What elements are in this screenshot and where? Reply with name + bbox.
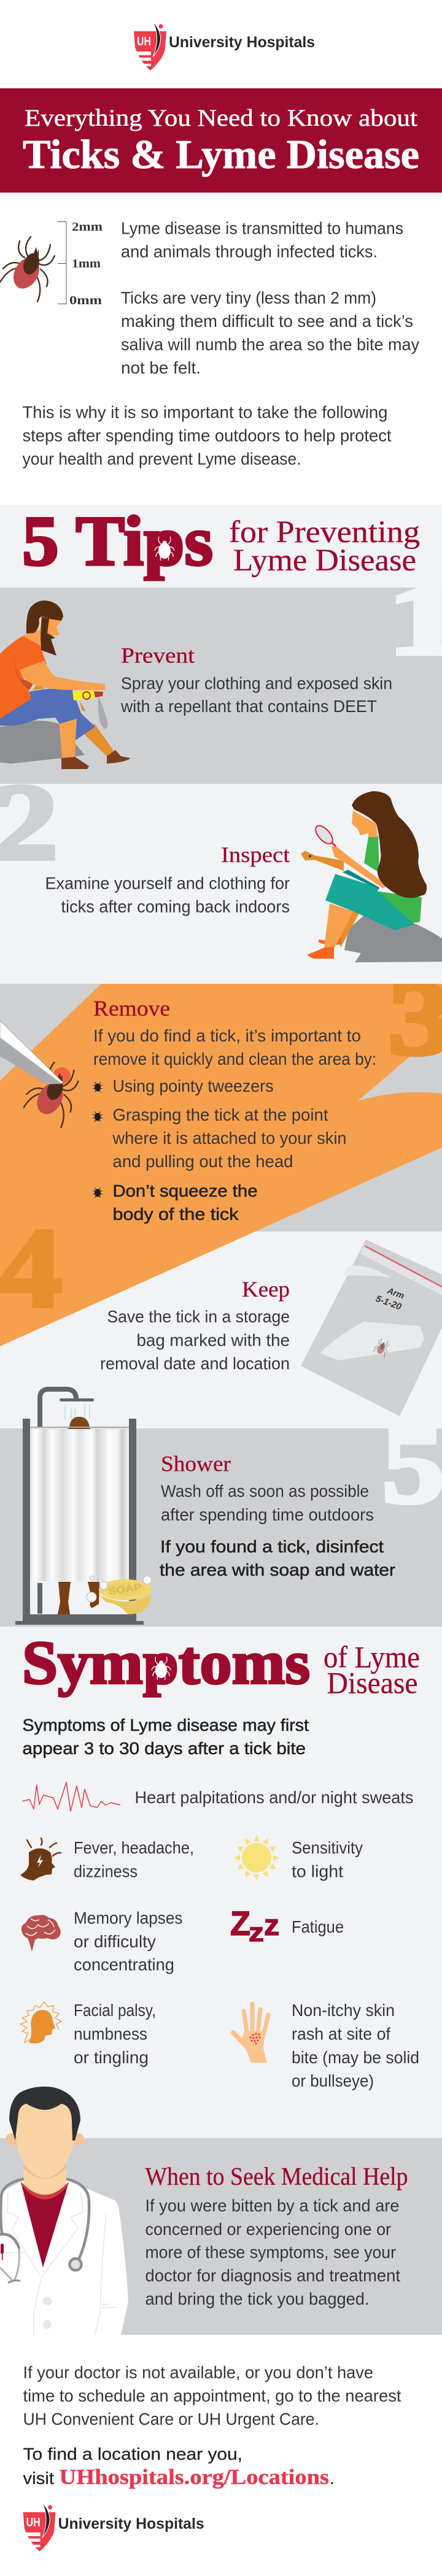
- text: inspect: [45, 843, 290, 916]
- intro text: not be felt.: [121, 358, 201, 377]
- text: shower: the area with soap and water: [160, 1560, 395, 1579]
- title banner: Everything You Need to Know about: [25, 105, 417, 131]
- text: urgent care note: time to schedule an appointment, go to the nearest: [23, 2386, 401, 2405]
- symptom: skin rash: [233, 2001, 419, 2090]
- symptom: fatigue: Fatigue: [292, 1917, 344, 1936]
- footer logo: University Hospitals: UH: [26, 2516, 41, 2529]
- illustration: tweezers removing a tick: [0, 1021, 79, 1127]
- heading: 5 Tips: 5 Tips: [22, 502, 213, 580]
- text: inspect: Examine yourself and clothing for: [45, 873, 290, 893]
- text: inspect: ticks after coming back indoors: [61, 897, 290, 916]
- text: urgent care note: [23, 2363, 401, 2429]
- symptom: skin rash: Non-itchy skin: [292, 2001, 395, 2020]
- symptom: facial palsy: or tingling: [74, 2048, 149, 2067]
- bullet list: Don’t squeeze the: [113, 1181, 258, 1200]
- symptom: light sensitivity: to light: [292, 1862, 343, 1880]
- symptom: heart palpitations: [23, 1782, 413, 1811]
- text: medical help: [145, 2162, 408, 2309]
- text: shower: Wash off as soon as possible: [161, 1482, 369, 1500]
- heading: 5 Tips: for Preventing: [229, 515, 420, 550]
- text: remove: [93, 996, 376, 1224]
- symptom: heart palpitations: Heart palpitations and/or night sweats: [135, 1788, 414, 1807]
- icon: tick with size scale: 1mm: [72, 257, 101, 270]
- heading: symptoms: of Lyme: [324, 1640, 420, 1674]
- text: shower: If you found a tick, disinfect: [160, 1537, 384, 1556]
- panel: tip 2 inspect: [0, 784, 442, 984]
- intro text: making them difficult to see and a tick’s: [121, 312, 413, 331]
- icon: tick with size scale: 0mm: [69, 294, 102, 307]
- intro text: steps after spending time outdoors to help protect: [22, 426, 392, 445]
- text: shower: Shower: [161, 1451, 231, 1476]
- text: medical help: doctor for diagnosis and treatment: [145, 2266, 400, 2285]
- panel: tips 3 and 4 background: [0, 984, 442, 1428]
- intro text: This is why it is so important to take the following: [22, 402, 388, 422]
- title banner: [0, 88, 442, 193]
- title banner: Ticks & Lyme Disease: [23, 132, 419, 177]
- intro text: Ticks are very tiny (less than 2 mm): [121, 288, 376, 307]
- text: medical help: concerned or experiencing one or: [145, 2220, 391, 2239]
- symptom: fever: dizziness: [74, 1862, 138, 1880]
- illustration: shower with soap: [15, 1389, 152, 1625]
- symptom: skin rash: bite (may be solid: [292, 2048, 419, 2067]
- illustration: storage bag with tick: [301, 1240, 442, 1416]
- panel: tip 5 shower: [0, 1389, 442, 1627]
- symptom: memory lapses: Memory lapses: [74, 1909, 183, 1927]
- symptom: fatigue: [230, 1904, 344, 1947]
- panel: when to seek medical help: [0, 2087, 442, 2335]
- icon: tick with size scale: [0, 220, 103, 307]
- illustration: storage bag with tick: 5-1-20: [374, 1294, 403, 1313]
- logo: University Hospitals: University Hospitals: [169, 34, 315, 51]
- bullet list: where it is attached to your skin: [112, 1129, 346, 1148]
- text: medical help: If you were bitten by a tick and are: [145, 2196, 399, 2215]
- text: symptoms intro: Symptoms of Lyme disease may first: [22, 1715, 309, 1735]
- footer logo: University Hospitals: University Hospitals: [58, 2515, 204, 2532]
- symptom: skin rash: or bullseye): [292, 2071, 374, 2090]
- symptom: light sensitivity: Sensitivity: [292, 1838, 363, 1857]
- text: prevent: Spray your clothing and exposed skin: [121, 673, 392, 693]
- symptom: facial palsy: [20, 2001, 156, 2067]
- intro text: [22, 218, 419, 469]
- text: find a location: visit: [23, 2469, 54, 2488]
- text: keep: bag marked with the: [136, 1331, 290, 1349]
- symptom: skin rash: rash at site of: [292, 2024, 390, 2044]
- symptom: memory lapses: concentrating: [74, 1955, 174, 1974]
- text: keep: Save the tick in a storage: [107, 1307, 290, 1326]
- text: find a location: .: [330, 2469, 335, 2488]
- text: medical help: more of these symptoms, see your: [145, 2242, 396, 2262]
- text: find a location: To find a location near you,: [23, 2445, 242, 2463]
- heading: 5 Tips: [0, 502, 442, 588]
- text: inspect: Inspect: [221, 843, 290, 867]
- illustration: woman with magnifier: [301, 791, 442, 962]
- heading: symptoms: Symptoms: [22, 1628, 310, 1696]
- logo: University Hospitals: [134, 21, 315, 71]
- text: prevent: with a repellant that contains DEET: [120, 697, 377, 716]
- text: keep: Keep: [242, 1277, 290, 1301]
- text: find a location: [23, 2445, 335, 2489]
- text: keep: removal date and location: [100, 1354, 290, 1373]
- text: shower: [160, 1451, 395, 1579]
- text: remove: Remove: [93, 996, 170, 1021]
- icon: tick with size scale: 2mm: [72, 220, 103, 234]
- text: find a location: UHhospitals.org/Locations: [59, 2465, 329, 2489]
- illustration: shower with soap: SOAP: [107, 1582, 142, 1597]
- text: medical help: and bring the tick you bagged.: [145, 2289, 370, 2309]
- symptom: fatigue: Z: [230, 1904, 250, 1942]
- logo: University Hospitals: UH: [137, 35, 151, 48]
- text: urgent care note: UH Convenient Care or UH Urgent Care.: [23, 2409, 319, 2429]
- symptom: light sensitivity: [234, 1835, 363, 1880]
- intro text: Lyme disease is transmitted to humans: [121, 218, 403, 238]
- symptom: fatigue: z: [249, 1918, 264, 1947]
- bullet list: and pulling out the head: [113, 1152, 293, 1171]
- heading: 5 Tips: Lyme Disease: [233, 543, 416, 578]
- symptom: facial palsy: numbness: [74, 2024, 147, 2044]
- bullet list: body of the tick: [113, 1205, 239, 1224]
- footer logo: University Hospitals: [23, 2502, 204, 2551]
- text: shower: after spending time outdoors: [161, 1505, 374, 1524]
- heading: symptoms: [22, 1628, 420, 1700]
- text: remove: remove it quickly and clean the area by:: [93, 1049, 376, 1068]
- illustration: doctor: [0, 2087, 128, 2335]
- intro text: and animals through infected ticks.: [121, 242, 378, 261]
- text: remove: If you do find a tick, it’s important to: [93, 1026, 361, 1045]
- intro text: saliva will numb the area so the bite may: [121, 335, 419, 354]
- panel: symptoms: [0, 1627, 442, 2138]
- text: prevent: Prevent: [121, 643, 195, 667]
- bullet list: Grasping the tick at the point: [113, 1105, 328, 1124]
- symptom: fatigue: z: [264, 1909, 279, 1942]
- text: symptoms intro: appear 3 to 30 days after a tick bite: [22, 1739, 306, 1758]
- illustration: storage bag with tick: Arm: [386, 1285, 406, 1300]
- heading: symptoms: Disease: [327, 1666, 417, 1700]
- intro text: your health and prevent Lyme disease.: [22, 449, 301, 469]
- symptom: fever: Fever, headache,: [74, 1838, 194, 1857]
- text: medical help: When to Seek Medical Help: [145, 2162, 408, 2190]
- bullet list: Using pointy tweezers: [113, 1076, 274, 1095]
- symptom: memory lapses: or difficulty: [74, 1932, 156, 1951]
- text: prevent: [120, 643, 392, 716]
- symptom: facial palsy: Facial palsy,: [74, 2001, 156, 2020]
- bullet list: [93, 1076, 346, 1224]
- text: symptoms intro: [22, 1715, 309, 1758]
- symptom: fever: [20, 1838, 194, 1880]
- symptom: memory lapses: [21, 1909, 182, 1974]
- panel: tip 1 prevent: [0, 588, 442, 784]
- illustration: man spraying repellent: [0, 600, 130, 769]
- text: urgent care note: If your doctor is not available, or you don’t have: [23, 2363, 373, 2382]
- text: keep: [100, 1277, 290, 1373]
